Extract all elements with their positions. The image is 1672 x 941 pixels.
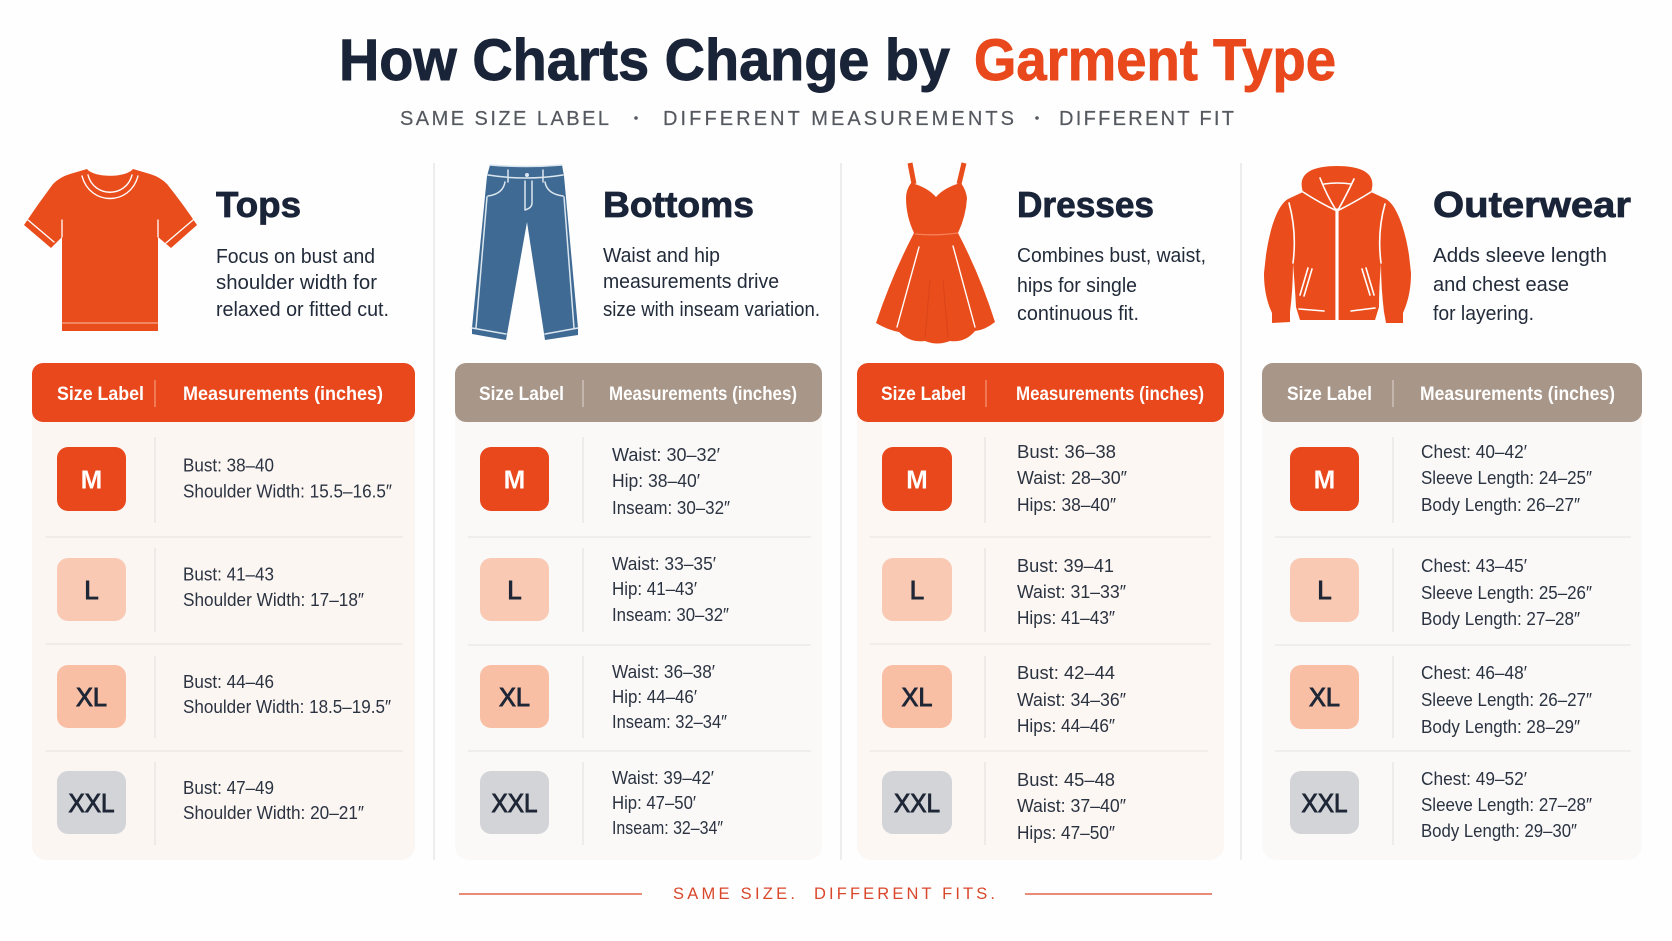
table header — [857, 363, 1224, 422]
row: outerwear L — [1290, 555, 1592, 629]
row: bottoms XXL: Hip: 47–50′ — [612, 792, 696, 813]
row: dresses M — [882, 441, 1127, 515]
row: bottoms XL — [480, 661, 727, 732]
row: outerwear L: L — [1317, 575, 1332, 605]
row: tops L: Shoulder Width: 17–18″ — [183, 589, 364, 610]
row: dresses XXL: Bust: 45–48 — [1017, 769, 1115, 790]
row: bottoms XL: Inseam: 32–34″ — [612, 711, 727, 732]
row: bottoms L: Waist: 33–35′ — [612, 553, 716, 574]
description: tops: Focus on bust and — [216, 246, 375, 268]
row: tops L: L — [84, 575, 99, 605]
row: outerwear XXL: XXL — [1302, 788, 1348, 818]
table header: Measurements (inches) — [183, 384, 383, 405]
row: dresses L: Waist: 31–33″ — [1017, 581, 1126, 602]
row: dresses XXL — [882, 769, 1126, 843]
description: bottoms: measurements drive — [603, 271, 779, 293]
subtitle: SAME SIZE LABEL — [400, 108, 609, 130]
footer tagline: SAME SIZE. — [673, 885, 795, 903]
heading: bottoms: Bottoms — [603, 184, 754, 225]
row: bottoms XXL: Inseam: 32–34″ — [612, 817, 723, 838]
row: bottoms XXL: XXL — [492, 788, 538, 818]
row: bottoms L — [480, 553, 729, 625]
description: dresses — [1017, 245, 1206, 325]
table: dresses — [857, 363, 1224, 860]
heading: outerwear: Outerwear — [1433, 184, 1631, 225]
description: tops: shoulder width for — [216, 272, 377, 294]
description: bottoms — [603, 245, 820, 321]
row: dresses XXL: Waist: 37–40″ — [1017, 795, 1126, 816]
row: dresses L: L — [910, 575, 924, 605]
footer tagline — [459, 885, 1212, 903]
row: tops L — [57, 558, 364, 621]
row: dresses L: Hips: 41–43″ — [1017, 607, 1115, 628]
description: outerwear: and chest ease — [1433, 274, 1569, 296]
row: dresses XXL: Hips: 47–50″ — [1017, 822, 1115, 843]
table header — [32, 363, 415, 422]
panel: tops — [24, 169, 415, 860]
table header: Size Label — [881, 384, 966, 405]
row: bottoms XL: XL — [499, 682, 530, 712]
subtitle: DIFFERENT FIT — [1059, 108, 1234, 130]
row: outerwear XL — [1290, 662, 1592, 737]
icon: jeans — [472, 165, 578, 340]
row: outerwear XL: Body Length: 28–29″ — [1421, 716, 1580, 737]
description: outerwear: Adds sleeve length — [1433, 245, 1607, 267]
table: bottoms — [455, 363, 822, 860]
row: outerwear L: Body Length: 27–28″ — [1421, 608, 1580, 629]
row: bottoms L: L — [507, 575, 522, 605]
row: tops L: Bust: 41–43 — [183, 564, 274, 584]
description: bottoms: Waist and hip — [603, 245, 720, 267]
row: bottoms XXL — [480, 767, 723, 838]
row: dresses M: Hips: 38–40″ — [1017, 494, 1116, 515]
row: tops XXL: Bust: 47–49 — [183, 777, 274, 798]
row: dresses XL: Waist: 34–36″ — [1017, 689, 1126, 710]
title: How Charts Change by — [339, 28, 950, 93]
row: dresses XL: XL — [902, 682, 932, 712]
description: outerwear — [1433, 245, 1607, 325]
table header — [455, 363, 822, 422]
description: tops: relaxed or fitted cut. — [216, 299, 389, 321]
row: outerwear M: Body Length: 26–27″ — [1421, 494, 1580, 515]
row: dresses L: Bust: 39–41 — [1017, 555, 1114, 576]
row: outerwear XXL: Chest: 49–52′ — [1421, 768, 1527, 789]
footer tagline: DIFFERENT FITS. — [814, 885, 995, 903]
row: bottoms L: Hip: 41–43′ — [612, 578, 697, 599]
row: outerwear L: Chest: 43–45′ — [1421, 555, 1527, 576]
subtitle: DIFFERENT MEASUREMENTS — [663, 108, 1014, 130]
title: Garment Type — [974, 28, 1336, 93]
row: bottoms M: Hip: 38–40′ — [612, 470, 701, 491]
row: bottoms XL: Hip: 44–46′ — [612, 686, 697, 707]
icon: dress — [876, 163, 995, 344]
description: dresses: continuous fit. — [1017, 303, 1139, 325]
row: bottoms M: Inseam: 30–32″ — [612, 497, 730, 518]
row: tops XL — [57, 665, 391, 728]
row: tops XL: XL — [76, 682, 107, 712]
row: bottoms XXL: Waist: 39–42′ — [612, 767, 714, 788]
table: tops — [32, 363, 415, 860]
row: tops M: Bust: 38–40 — [183, 454, 274, 476]
table header: Size Label — [1287, 384, 1372, 405]
description: outerwear: for layering. — [1433, 303, 1534, 325]
row: dresses L — [882, 555, 1126, 628]
description: bottoms: size with inseam variation. — [603, 299, 820, 321]
row: tops M — [57, 447, 392, 511]
row: dresses XL — [882, 662, 1126, 736]
row: dresses M: M — [906, 464, 928, 494]
row: tops XL: Shoulder Width: 18.5–19.5″ — [183, 696, 391, 717]
heading: dresses: Dresses — [1017, 184, 1154, 225]
row: bottoms M: M — [504, 464, 525, 494]
row: outerwear XXL: Sleeve Length: 27–28″ — [1421, 794, 1592, 815]
row: bottoms L: Inseam: 30–32″ — [612, 604, 729, 625]
icon: jacket — [1264, 166, 1411, 323]
row: outerwear XXL — [1290, 768, 1592, 841]
table header: Measurements (inches) — [1016, 384, 1204, 405]
row: tops XXL: Shoulder Width: 20–21″ — [183, 802, 364, 823]
row: dresses M: Bust: 36–38 — [1017, 441, 1116, 462]
row: outerwear XL: XL — [1309, 682, 1340, 712]
row: tops XXL: XXL — [68, 788, 114, 818]
row: tops M: M — [81, 464, 102, 494]
description: dresses: hips for single — [1017, 275, 1137, 297]
panel: outerwear — [1262, 166, 1642, 860]
heading: tops: Tops — [216, 184, 301, 225]
title — [339, 28, 1336, 93]
row: outerwear M: Chest: 40–42′ — [1421, 441, 1527, 462]
row: tops XXL — [57, 771, 364, 834]
panel: bottoms — [455, 165, 822, 860]
table header: Measurements (inches) — [609, 384, 797, 405]
description: dresses: Combines bust, waist, — [1017, 245, 1206, 267]
table header: Measurements (inches) — [1420, 384, 1615, 405]
subtitle — [400, 108, 1234, 130]
row: tops XL: Bust: 44–46 — [183, 671, 274, 692]
row: outerwear L: Sleeve Length: 25–26″ — [1421, 582, 1592, 603]
table header — [1262, 363, 1642, 422]
row: dresses XL: Bust: 42–44 — [1017, 662, 1115, 683]
row: dresses XXL: XXL — [894, 788, 940, 818]
panel: dresses — [857, 163, 1224, 860]
row: outerwear M: Sleeve Length: 24–25″ — [1421, 467, 1592, 488]
row: bottoms M — [480, 444, 730, 518]
row: outerwear XL: Chest: 46–48′ — [1421, 662, 1527, 683]
row: outerwear XXL: Body Length: 29–30″ — [1421, 820, 1577, 841]
table header: Size Label — [479, 384, 564, 405]
row: bottoms M: Waist: 30–32′ — [612, 444, 721, 465]
row: tops M: Shoulder Width: 15.5–16.5″ — [183, 480, 392, 502]
row: outerwear M — [1290, 441, 1592, 515]
description: tops — [216, 246, 389, 321]
table: outerwear — [1262, 363, 1642, 860]
row: dresses M: Waist: 28–30″ — [1017, 467, 1127, 488]
icon: t-shirt — [24, 169, 197, 331]
row: outerwear XL: Sleeve Length: 26–27″ — [1421, 689, 1592, 710]
row: bottoms XL: Waist: 36–38′ — [612, 661, 715, 682]
row: outerwear M: M — [1314, 464, 1335, 494]
table header: Size Label — [57, 384, 144, 405]
row: dresses XL: Hips: 44–46″ — [1017, 715, 1115, 736]
